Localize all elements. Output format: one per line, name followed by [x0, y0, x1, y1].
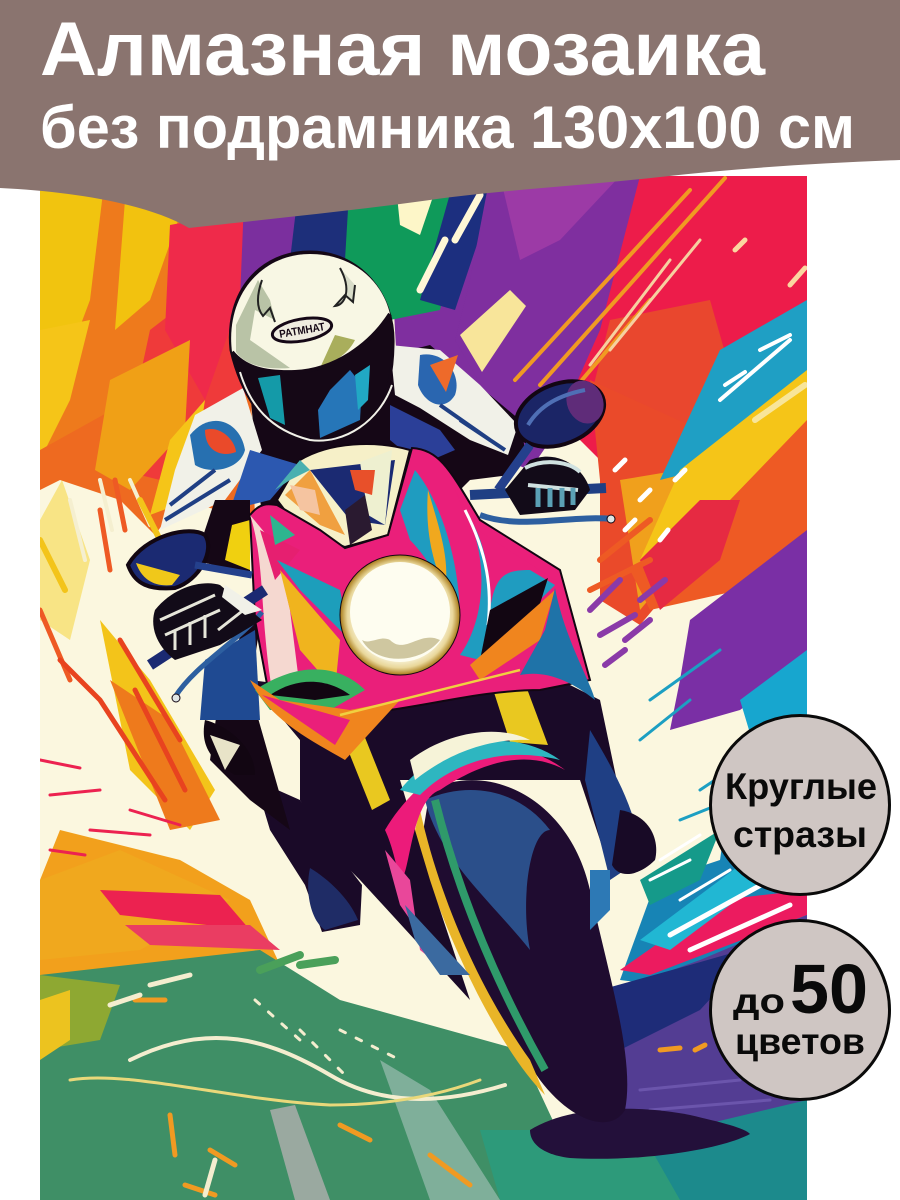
rider: arms and torso — [160, 345, 525, 830]
painted background — [40, 176, 807, 1200]
poster artwork: motorcycle rider — [40, 176, 807, 1200]
paint streaks and splashes — [40, 178, 805, 1195]
motorcycle front wheel — [415, 780, 627, 1122]
helmet logo — [270, 316, 334, 344]
helmet — [230, 252, 393, 441]
header banner — [0, 0, 900, 228]
right mirror — [494, 379, 606, 489]
badge: up to 50 colours: 50 — [790, 950, 868, 1028]
right handlebar and glove — [470, 457, 615, 523]
lower fairing — [250, 670, 656, 1000]
left handlebar and glove — [150, 583, 265, 702]
helmet logo: PATMHAT — [278, 321, 326, 341]
badge: round rhinestones — [710, 716, 890, 894]
upper fairing — [250, 448, 595, 760]
left mirror — [128, 531, 252, 588]
badge: up to 50 colours: цветов — [735, 1021, 865, 1062]
road shadow — [530, 1109, 750, 1159]
windscreen — [275, 444, 410, 547]
headlight — [340, 555, 460, 675]
badge: round rhinestones: Круглые — [725, 766, 877, 807]
badge: up to 50 colours — [710, 920, 890, 1100]
badge: up to 50 colours: до — [733, 982, 785, 1021]
badge: round rhinestones: стразы — [733, 814, 867, 855]
banner title line 1: Алмазная мозаика — [40, 7, 766, 92]
banner title line 2: без подрамника 130х100 см — [40, 94, 855, 161]
